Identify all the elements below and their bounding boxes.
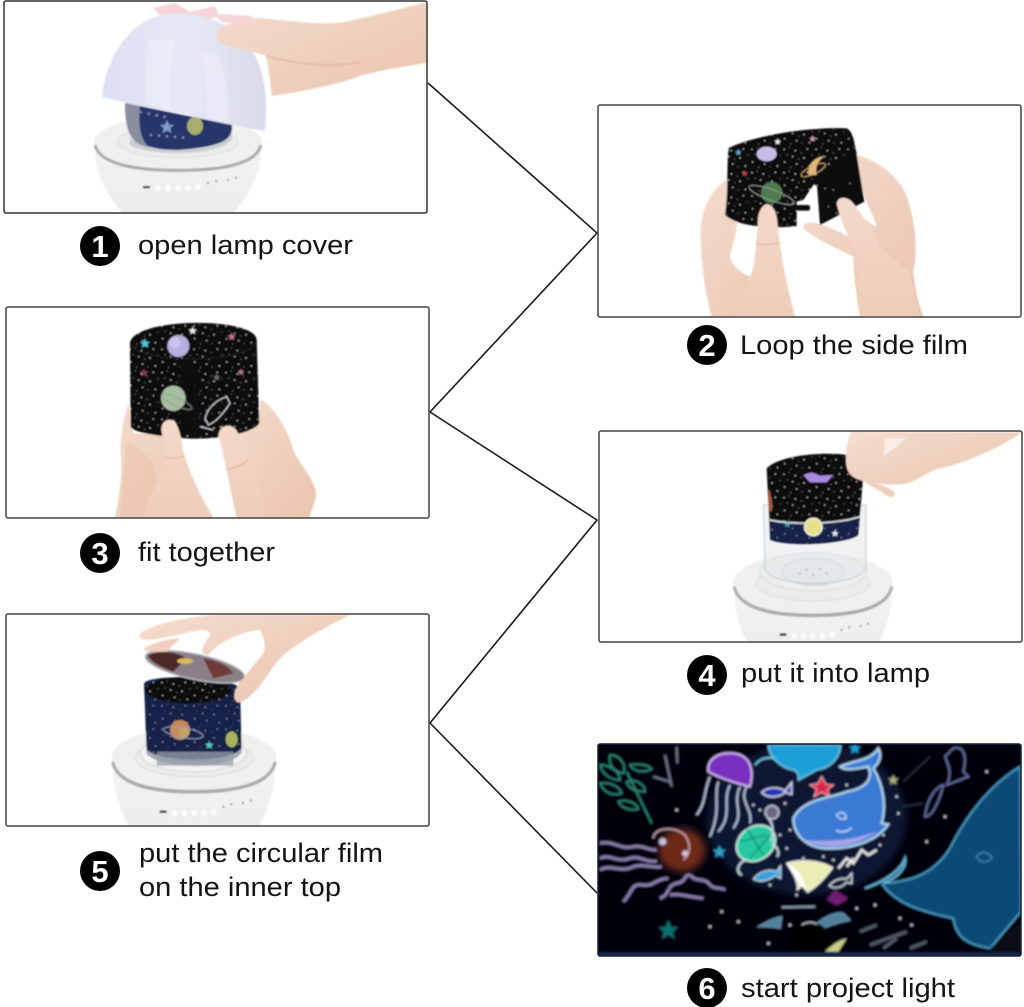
photo: sea creatures projected on a dark wall: [598, 742, 1021, 957]
number badge 5: 5: [91, 854, 109, 889]
label: open lamp cover: open lamp cover: [138, 230, 353, 260]
number badge 1: [80, 226, 120, 266]
panel: step 3 photo: [6, 307, 429, 518]
panel border: [6, 614, 429, 826]
photo: hand lifting lamp cover: [94, 2, 427, 228]
panel border: [599, 431, 1022, 642]
photo: hands looping the side film: [701, 128, 923, 317]
number badge 5: [80, 851, 120, 891]
label: start project light: start project light: [741, 973, 956, 1003]
caption: step 1: [80, 226, 353, 266]
panel border: [598, 744, 1021, 956]
caption: step 2: [687, 325, 968, 365]
number badge 1: 1: [91, 229, 109, 264]
panel border: [598, 105, 1021, 317]
label: put the circular film on the inner top: put the circular film: [139, 838, 383, 868]
number badge 3: 3: [91, 536, 109, 571]
arrow: zigzag connector linking the steps: [428, 83, 597, 893]
caption: step 5: [80, 838, 383, 902]
label: put it into lamp: put it into lamp: [741, 658, 930, 688]
panel: step 2 photo: [598, 105, 1021, 317]
number badge 3: [80, 533, 120, 573]
number badge 2: [687, 325, 727, 365]
label: put the circular film on the inner top: [139, 838, 383, 902]
panel: step 6 projected light photo: [598, 742, 1021, 957]
photo: hand placing film into lamp: [732, 432, 1021, 642]
photo: hands fitting the film together: [115, 323, 316, 518]
caption: step 3: [80, 533, 275, 573]
panel: step 5 photo: [5, 613, 430, 827]
photo: hand placing circular film on inner top: [110, 614, 350, 826]
label: fit together: fit together: [138, 537, 275, 567]
number badge 2: 2: [698, 328, 716, 363]
panel border: [6, 307, 429, 518]
number badge 6: 6: [698, 971, 716, 1006]
caption: step 4: [687, 655, 930, 695]
label: put the circular film on the inner top: on the inner top: [139, 872, 341, 902]
panel border: [4, 1, 427, 213]
panel: step 4 photo: [598, 430, 1023, 643]
number badge 6: [687, 968, 727, 1007]
number badge 4: 4: [698, 658, 716, 693]
number badge 4: [687, 655, 727, 695]
caption: step 6: [687, 968, 956, 1007]
label: Loop the side film: Loop the side film: [740, 330, 968, 360]
panel: step 1 photo: [4, 1, 427, 228]
